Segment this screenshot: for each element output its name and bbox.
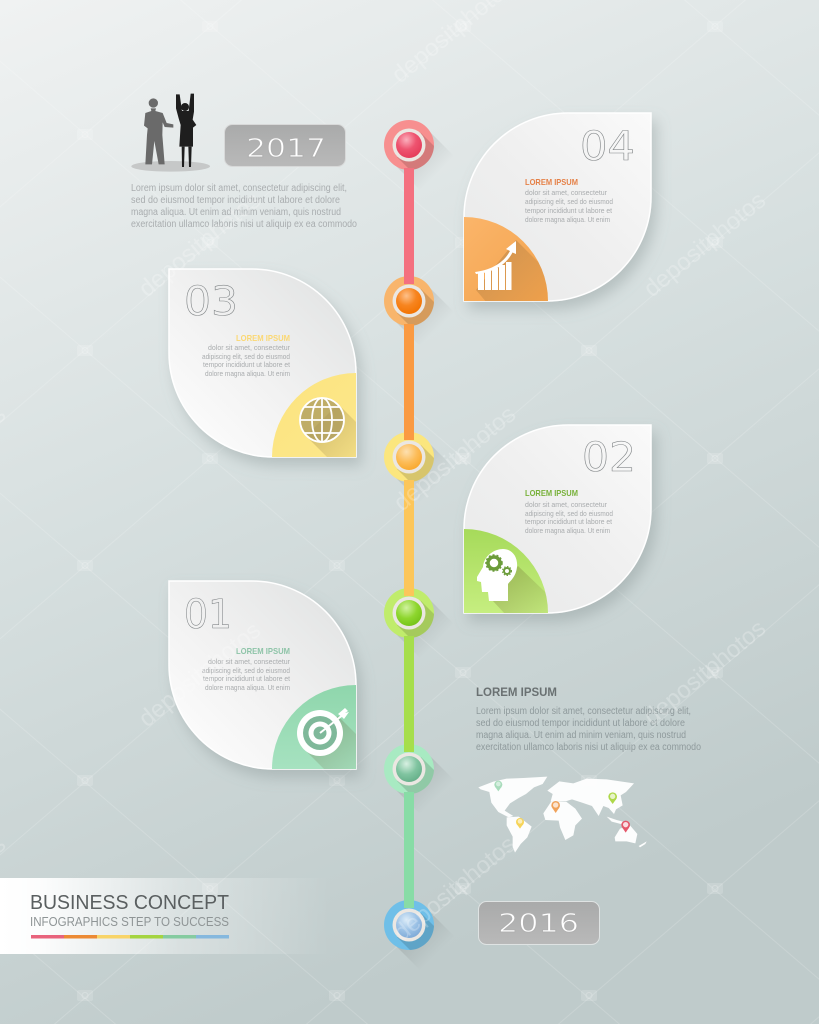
step 04 text [525,177,613,224]
year badge 2017: 2017 [246,134,326,164]
colour strip [31,935,229,938]
step 03 quarter panel [272,373,356,457]
step 02 quarter panel [464,529,548,613]
watermarks: depositphotos [134,617,266,733]
lorem ipsum text block: exercitation ullamco laboris nisi ut aliquip ex ea commodo [476,742,701,753]
icon: business people [131,94,210,172]
watermarks: depositphotos [389,831,521,947]
step 04 text: tempor incididunt ut labore et [525,206,613,215]
step 03 text: tempor incididunt ut labore et [203,360,291,369]
step number 01: 01 [184,592,232,638]
year badge 2016 [478,902,600,944]
timeline bar segments [404,168,414,908]
timeline node 3 [384,432,457,505]
intro paragraph: sed do eiusmod tempor incididunt ut labore et dolore [131,195,340,206]
banner: business concept [0,878,330,954]
step 04 text: LOREM IPSUM [525,177,578,187]
map pin: yellow [516,818,524,829]
world map [478,777,647,853]
watermarks: depositphotos [639,615,771,731]
lorem ipsum text block: sed do eiusmod tempor incididunt ut labore et dolore [476,718,685,729]
lorem ipsum text block: Lorem ipsum dolor sit amet, consectetur adipiscing elit, [476,706,691,717]
watermarks: depositphotos [389,401,521,517]
map pin: green [608,792,617,804]
step 01 icon shadow [307,716,356,769]
step 01 quarter panel [272,685,356,769]
intro paragraph: Lorem ipsum dolor sit amet, consectetur adipiscing elit, [131,183,347,194]
timeline node 5 [384,744,457,817]
panel: step 02 [464,425,651,650]
step 02 text: dolore magna aliqua. Ut enim [525,526,610,535]
icon: target with arrow [297,708,349,756]
timeline node 2 [384,276,457,349]
step 03 icon shadow [308,406,356,457]
step number 04: 04 [580,124,635,170]
step number 03: 03 [184,279,238,325]
step 03 text [202,333,291,378]
step 03 text: LOREM IPSUM [236,333,290,343]
banner subtitle: INFOGRAPHICS STEP TO SUCCESS [30,914,229,929]
timeline node 6 [384,900,457,973]
step 02 icon shadow [493,566,548,613]
step 03 text: dolore magna aliqua. Ut enim [205,369,290,378]
intro paragraph [131,183,357,230]
icon: globe [300,398,344,442]
lorem ipsum text block [476,685,701,753]
panel: step 01 [168,580,366,783]
step 01 text: dolore magna aliqua. Ut enim [205,683,290,692]
step 04 icon shadow [476,240,546,301]
step 02 text: adipiscing elit, sed do eiusmod [525,509,613,518]
map pin: orange [551,801,560,813]
map pin: mint [494,781,502,791]
watermarks: depositphotos [134,187,266,303]
step 02 text [525,488,613,535]
step 01 text [202,646,291,692]
step 01 text: adipiscing elit, sed do eiusmod [202,666,290,675]
map pin: red [621,821,630,833]
step 01 text: LOREM IPSUM [236,646,290,656]
lorem ipsum text block: LOREM IPSUM [476,685,557,699]
panel: step 03 [168,268,366,470]
intro paragraph: exercitation ullamco laboris nisi ut aliquip ex ea commodo [131,219,357,230]
step 02 text: tempor incididunt ut labore et [525,517,613,526]
step 01 text: tempor incididunt ut labore et [203,674,291,683]
step 02 text: dolor sit amet, consectetur [525,500,607,509]
watermarks: depositphotos [639,187,771,303]
step number 02: 02 [582,435,636,481]
step 04 quarter panel [464,217,548,301]
step 01 text: dolor sit amet, consectetur [208,657,290,666]
step 04 text: adipiscing elit, sed do eiusmod [525,197,613,206]
step 02 text: LOREM IPSUM [525,488,578,498]
step 03 text: adipiscing elit, sed do eiusmod [202,352,290,361]
step 04 text: dolor sit amet, consectetur [525,188,607,197]
lorem ipsum text block: magna aliqua. Ut enim ad minim veniam, quis nostrud [476,730,686,741]
icon: head with gears [477,549,517,601]
icon: growth chart [475,241,516,290]
panel: step 04 [464,113,651,330]
year badge 2017 [224,124,346,166]
intro paragraph: magna aliqua. Ut enim ad minim veniam, quis nostrud [131,207,341,218]
step 04 text: dolore magna aliqua. Ut enim [525,215,610,224]
step 03 text: dolor sit amet, consectetur [208,343,290,352]
year badge 2016: 2016 [498,909,579,939]
timeline node 1 [384,120,457,193]
banner title: BUSINESS CONCEPT [30,892,229,914]
timeline node 4 [384,588,457,661]
